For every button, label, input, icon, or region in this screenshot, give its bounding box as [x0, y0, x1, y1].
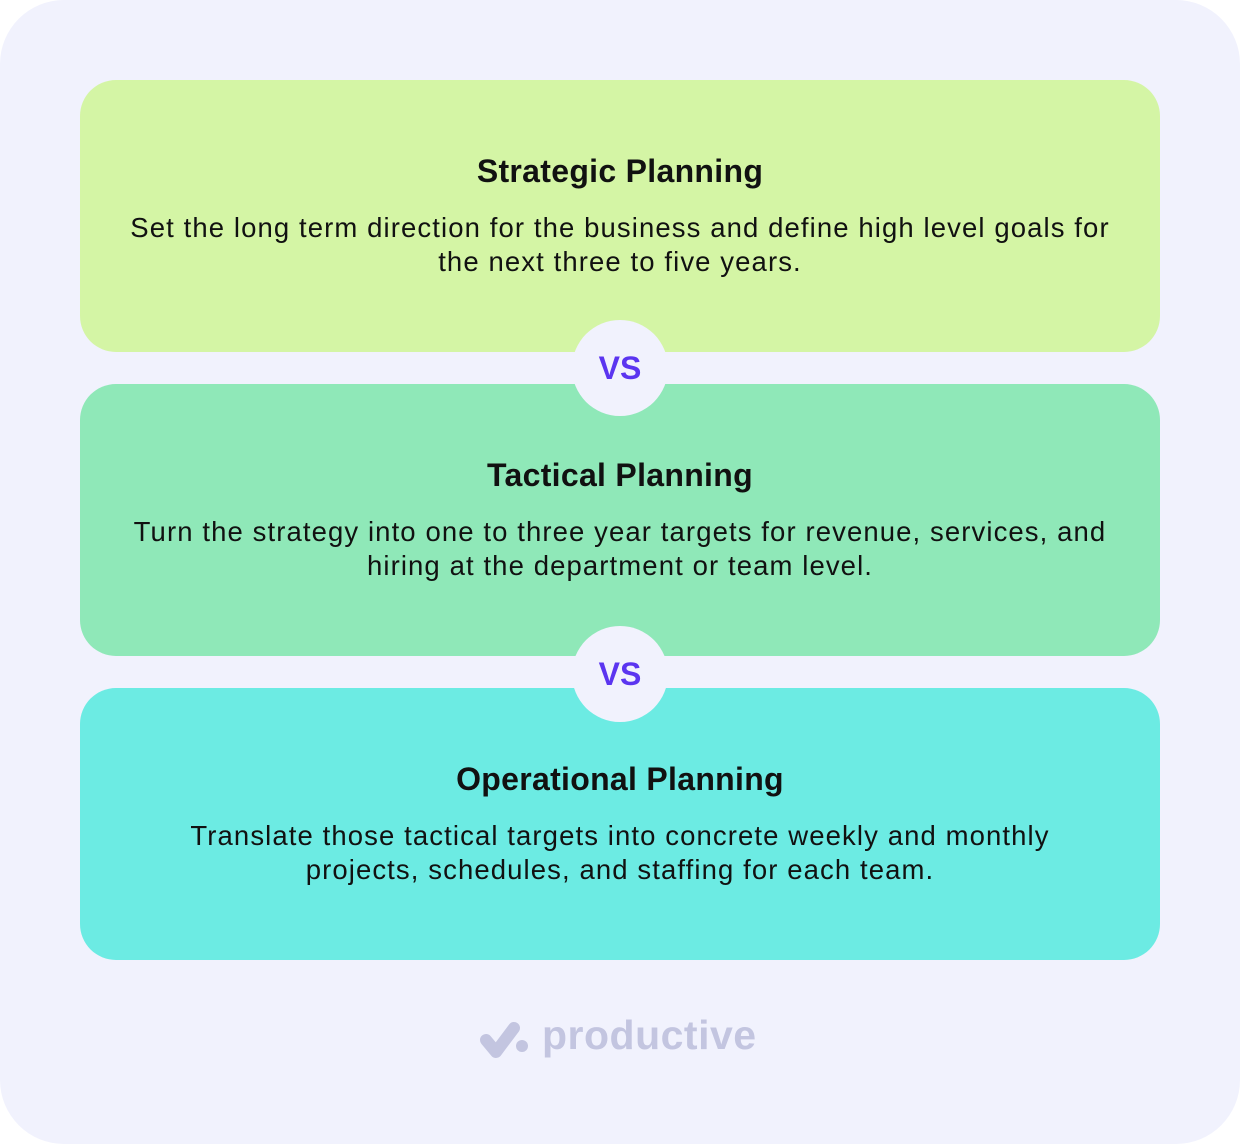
heading: operational: Operational Planning	[456, 761, 784, 797]
panel: strategic planning	[80, 80, 1160, 352]
heading: strategic: Strategic Planning	[477, 153, 763, 189]
text: strategic description: the next three to five years.	[438, 246, 802, 277]
text: operational description: Translate those tactical targets into concrete weekly and monthly	[190, 820, 1050, 851]
text: tactical description: Turn the strategy into one to three year targets for revenue, services, and	[134, 516, 1106, 547]
heading: tactical: Tactical Planning	[487, 457, 753, 493]
text: tactical description: hiring at the department or team level.	[367, 550, 873, 581]
text: operational description	[190, 820, 1050, 885]
text: strategic description	[130, 212, 1110, 277]
panel: operational planning	[80, 688, 1160, 960]
text: operational description: projects, schedules, and staffing for each team.	[306, 854, 934, 885]
vs badge 1	[572, 320, 668, 416]
logo: productive: productive	[542, 1012, 757, 1058]
text: strategic description: Set the long term direction for the business and define high level goals for	[130, 212, 1110, 243]
panel: tactical planning	[80, 384, 1160, 656]
vs badge 2: VS	[599, 656, 641, 692]
text: tactical description	[134, 516, 1106, 581]
vs badge 1: VS	[599, 350, 641, 386]
vs badge 2	[572, 626, 668, 722]
